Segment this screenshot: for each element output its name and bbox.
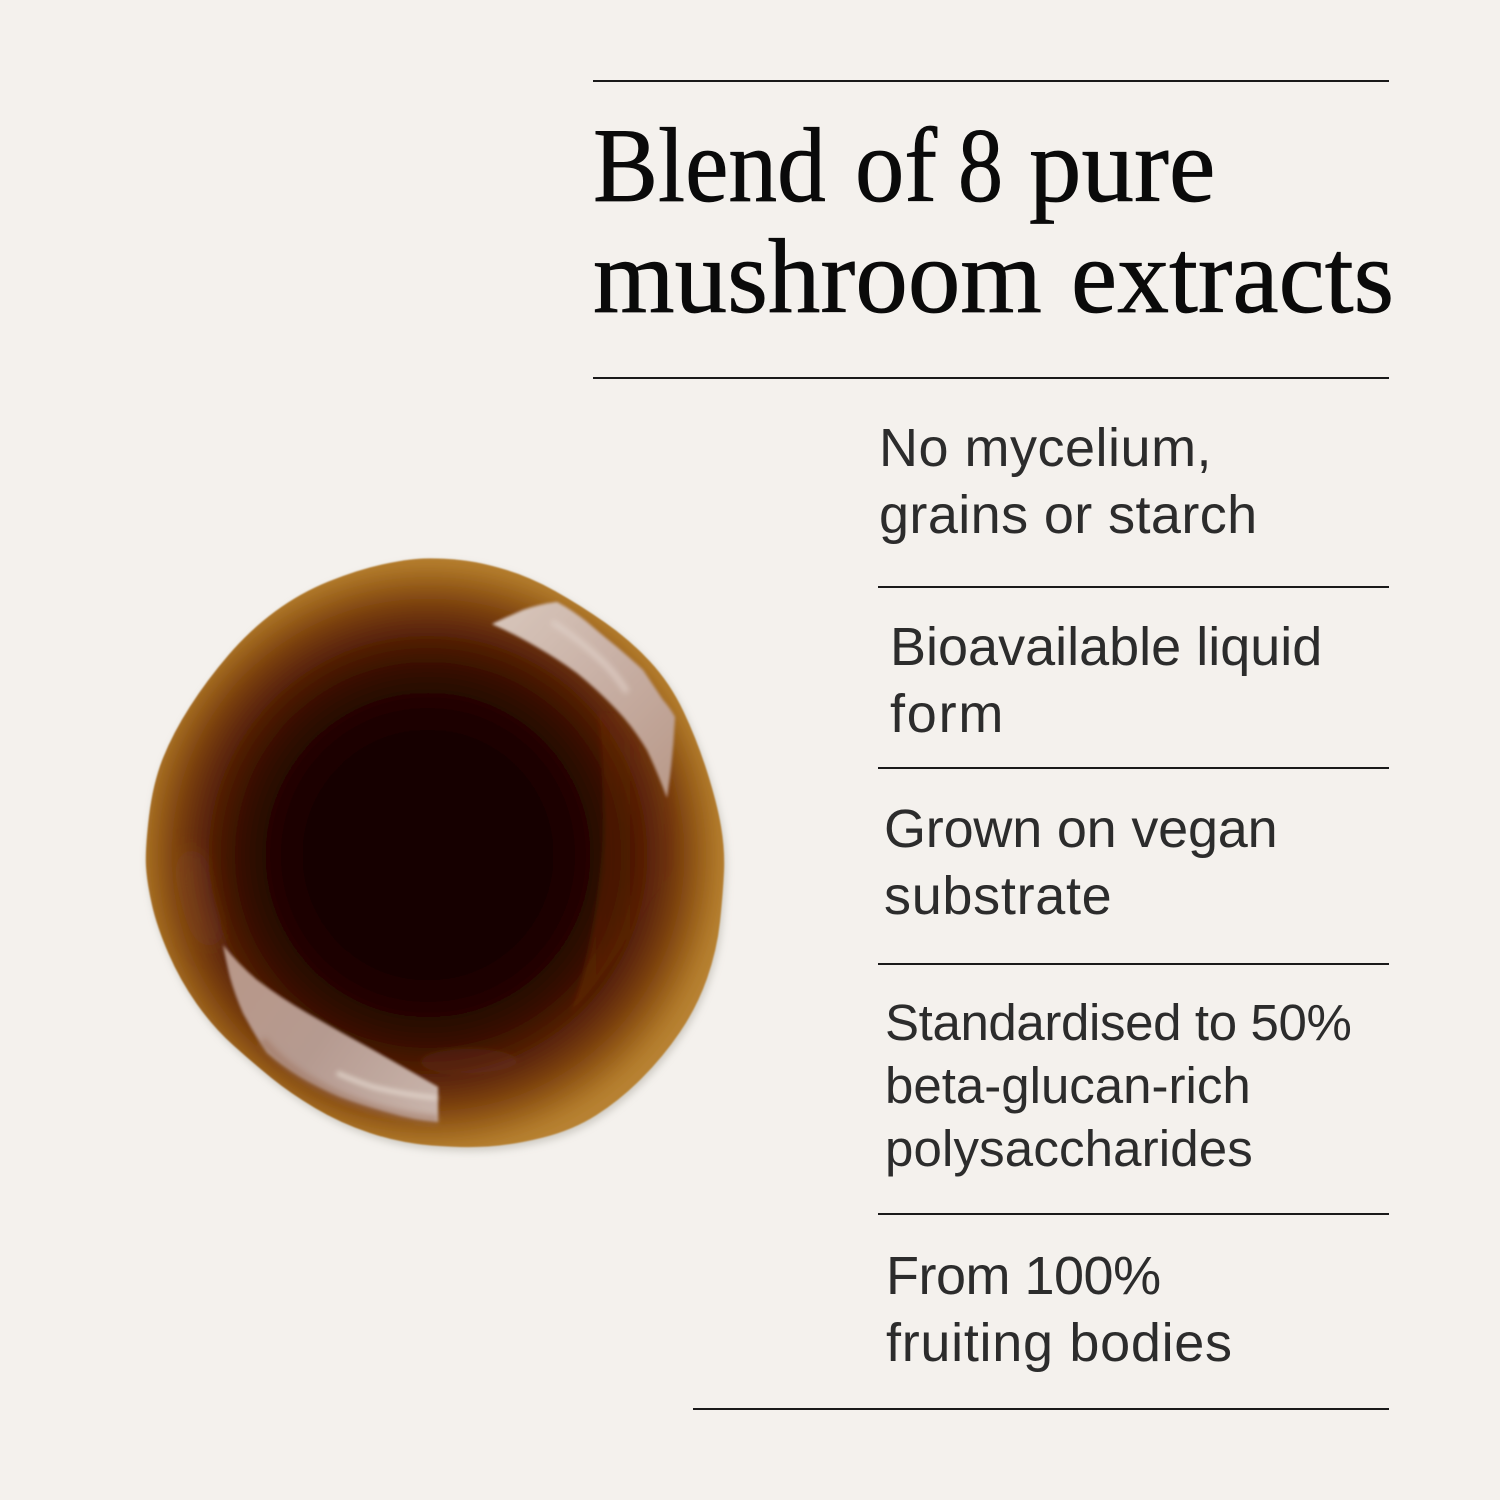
text: standardised: beta-glucan-rich xyxy=(885,1057,1251,1114)
text: no mycelium xyxy=(879,418,1258,545)
text: fruiting bodies: From 100% xyxy=(886,1246,1161,1306)
title xyxy=(593,107,1394,335)
title: pure xyxy=(1029,107,1215,224)
text: no mycelium: grains or starch xyxy=(879,485,1258,545)
text: no mycelium: No mycelium, xyxy=(879,418,1212,478)
highlight: upper right gloss xyxy=(492,602,675,798)
highlight: lower left gloss xyxy=(223,945,438,1122)
text: bioavailable: form xyxy=(890,684,1005,744)
text: standardised: Standardised to 50% xyxy=(885,994,1351,1051)
title: extracts xyxy=(1071,218,1394,335)
text: vegan substrate: substrate xyxy=(884,866,1112,926)
text: bioavailable xyxy=(890,617,1322,744)
title: 8 xyxy=(958,107,1003,224)
text: standardised: polysaccharides xyxy=(885,1120,1253,1177)
text: fruiting bodies xyxy=(886,1246,1233,1373)
title: mushroom xyxy=(593,218,1042,335)
text: vegan substrate: Grown on vegan xyxy=(884,799,1277,859)
blob: mushroom extract droplet xyxy=(144,557,730,1154)
title: Blend xyxy=(593,107,826,224)
text: fruiting bodies: fruiting bodies xyxy=(886,1313,1233,1373)
text: vegan substrate xyxy=(884,799,1277,926)
text: bioavailable: Bioavailable liquid xyxy=(890,617,1322,677)
title: of xyxy=(855,107,937,224)
text: standardised xyxy=(885,994,1351,1177)
